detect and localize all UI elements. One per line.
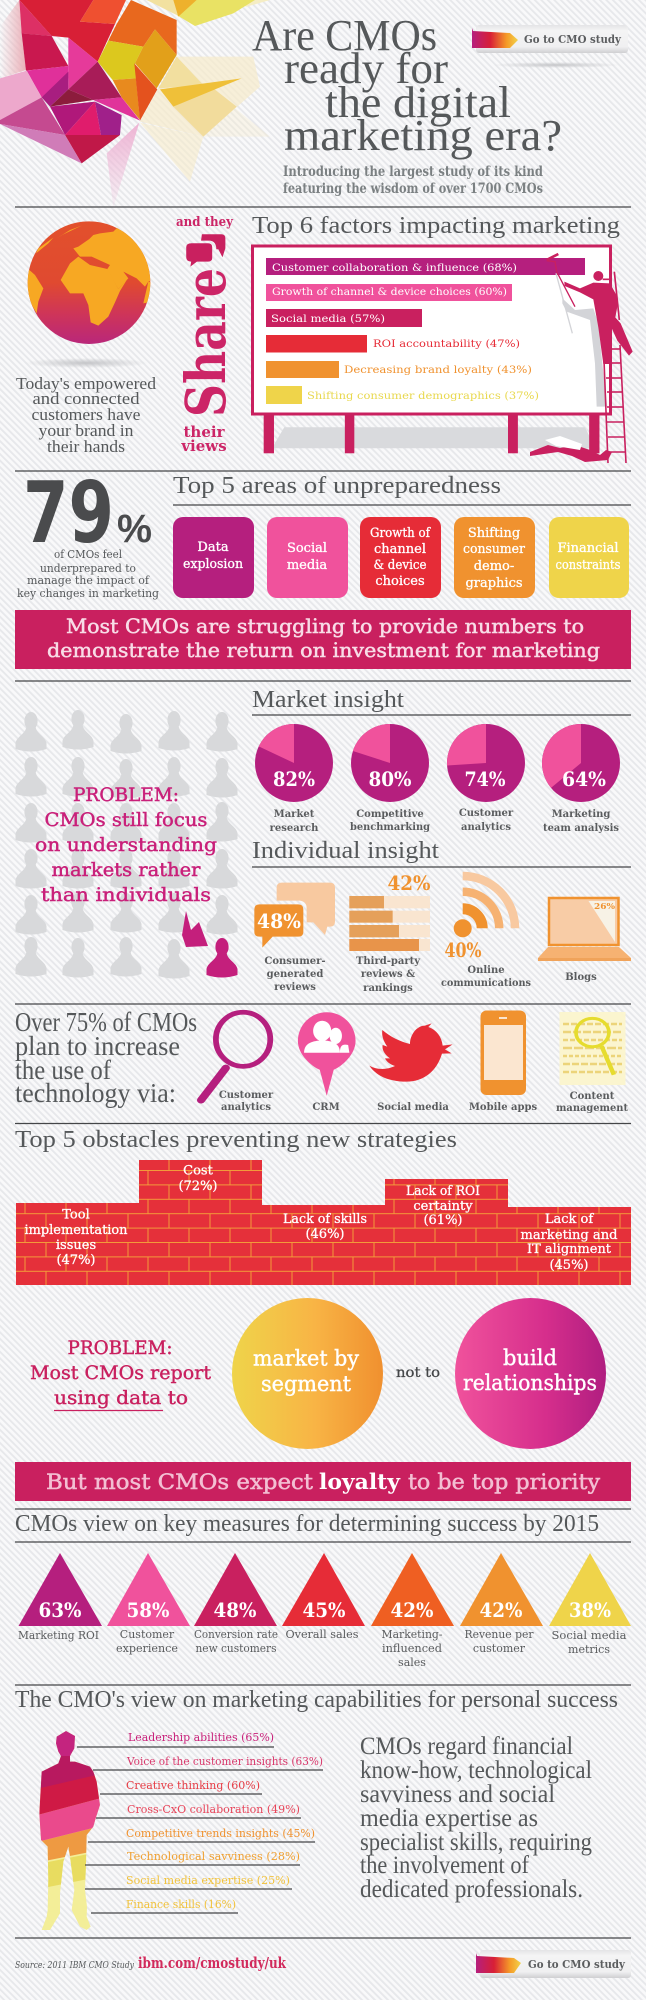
triangle: revenue per customer: customer <box>473 1642 526 1655</box>
item: voice of customer: Voice of the customer insights (63%) <box>126 1755 323 1768</box>
panel: crowd of people <box>16 710 238 978</box>
icon: review bars: 42% <box>388 871 430 895</box>
icon: pin CRM: CRM <box>312 1102 340 1113</box>
pie: marketing team analysis: Marketing <box>552 809 610 820</box>
bar: customer collaboration <box>266 258 585 275</box>
text: problem individuals: on understanding <box>35 834 217 856</box>
text: CMOs regard paragraph: the involvement of <box>360 1852 530 1879</box>
button: footer go to CMO study <box>476 1950 631 1978</box>
icon: magnifier customer analytics: Customer <box>219 1090 274 1101</box>
label: ROI certainty: (61%) <box>423 1213 463 1228</box>
label: skills: (46%) <box>305 1227 345 1242</box>
panel: market insight: Market insight <box>252 687 404 713</box>
text: empowered customers: their hands <box>47 437 125 456</box>
label: ROI certainty: Lack of ROI <box>406 1184 480 1199</box>
label: tool implementation: Tool <box>62 1208 90 1222</box>
triangle: revenue per customer <box>460 1553 543 1655</box>
title <box>252 11 562 160</box>
text: over 75% of CMOs: technology via: <box>15 1078 176 1108</box>
label: marketing IT alignment: marketing and <box>520 1228 618 1243</box>
heading: marketing capabilities: The CMO's view on marketing capabilities for personal success <box>15 1687 618 1713</box>
box: growth of channel: & device <box>374 558 427 573</box>
panel: market insight <box>252 687 631 834</box>
label: marketing IT alignment: IT alignment <box>527 1242 612 1257</box>
text: underprepared: key changes in marketing <box>17 586 160 600</box>
item: cross-CxO: Cross-CxO collaboration (49%) <box>127 1803 300 1816</box>
label: tool implementation: implementation <box>24 1223 128 1238</box>
text: CMOs regard paragraph: media expertise as <box>360 1805 538 1832</box>
text: CMOs regard paragraph: CMOs regard financial <box>360 1733 573 1760</box>
button: go to CMO study <box>472 25 628 68</box>
box: shifting consumer demographics <box>454 517 535 598</box>
box: data explosion <box>173 517 254 598</box>
vertical word: share: Share <box>173 268 238 417</box>
box: shifting consumer demographics: Shifting <box>468 526 520 541</box>
label: marketing IT alignment: Lack of <box>545 1212 594 1227</box>
pie: competitive benchmarking <box>350 724 430 833</box>
icon: review bars: Third-party <box>356 956 421 967</box>
panel: technology icons <box>201 1010 628 1114</box>
text: underprepared: manage the impact of <box>27 573 150 587</box>
text: problem individuals: than individuals <box>41 884 211 906</box>
icon: phone mobile apps: Mobile apps <box>469 1102 537 1113</box>
text: CMOs regard paragraph: specialist skills, requiring <box>360 1829 592 1856</box>
item: technological savviness: Technological savviness (28%) <box>127 1850 300 1863</box>
text: underprepared: of CMOs feel <box>54 547 122 561</box>
panel: 79 percent <box>17 464 160 600</box>
icon: magnifier customer analytics <box>201 1012 274 1113</box>
panel: share their views: their <box>184 423 226 441</box>
pie: competitive benchmarking: 80% <box>368 767 412 791</box>
chart: triangles key measures <box>18 1553 631 1669</box>
item: social media expertise: Social media expertise (25%) <box>126 1874 290 1887</box>
icon: laptop blogs <box>538 898 631 983</box>
triangle: social media metrics: metrics <box>568 1643 610 1656</box>
triangle: marketing ROI: Marketing ROI <box>18 1629 99 1642</box>
panel: individual insight: Individual insight <box>252 838 439 864</box>
label: tool implementation <box>24 1208 128 1268</box>
item: competitive trends: Competitive trends insights (45%) <box>126 1827 315 1840</box>
icon: magnifier customer analytics: analytics <box>221 1102 271 1113</box>
text: over 75% of CMOs: plan to increase <box>15 1031 180 1061</box>
icon: phone mobile apps <box>469 1010 537 1113</box>
icon: document content management: management <box>556 1103 628 1114</box>
bar: channel and device choices: Growth of channel & device choices (60%) <box>272 287 507 298</box>
panel: share their views: and they <box>176 215 233 230</box>
triangle: marketing influenced sales <box>371 1553 454 1669</box>
circle: market by segment: segment <box>261 1372 352 1396</box>
icon: wifi arcs <box>441 876 531 989</box>
label: skills <box>283 1212 367 1242</box>
box: social media: media <box>287 558 327 573</box>
bar: social media: Social media (57%) <box>271 314 385 325</box>
triangle: revenue per customer: Revenue per <box>464 1628 534 1641</box>
icon: wifi arcs: communications <box>441 978 531 989</box>
text: over 75% of CMOs: the use of <box>15 1055 111 1085</box>
source line <box>15 1954 286 1972</box>
box: financial constraints <box>549 517 629 598</box>
icon: review bubbles: reviews <box>274 982 316 993</box>
box: social media <box>267 517 348 598</box>
circle: build relationships <box>455 1298 606 1449</box>
bar: consumer demographics <box>266 386 539 404</box>
triangle: marketing ROI: 63% <box>38 1598 82 1622</box>
text: over 75% of CMOs: Over 75% of CMOs <box>15 1007 197 1037</box>
text: empowered customers: your brand in <box>38 421 134 440</box>
triangle: customer experience: 58% <box>126 1598 170 1622</box>
shadow under globe <box>24 358 148 368</box>
pie: market research: 82% <box>273 767 315 791</box>
box: data explosion: Data <box>197 540 229 555</box>
pie: marketing team analysis <box>542 724 620 834</box>
panel: top 5 areas of unpreparedness <box>173 473 631 598</box>
icon: review bubbles: Consumer- <box>264 956 326 967</box>
icon: speech bubbles <box>186 234 225 267</box>
text: problem individuals <box>35 784 217 906</box>
label: ROI certainty: certainty <box>413 1199 473 1214</box>
panel: capabilities list <box>77 1731 323 1913</box>
title: ready for <box>284 44 448 93</box>
panel: share their views: views <box>180 437 227 455</box>
box: growth of channel: Growth of <box>370 526 431 541</box>
triangle: marketing influenced sales: Marketing- <box>382 1628 443 1641</box>
bar: brand loyalty <box>266 361 532 378</box>
triangle: conversion rate: 48% <box>214 1598 256 1622</box>
bar: ROI accountability: ROI accountability (47%) <box>373 339 520 350</box>
icon: review bubbles <box>254 883 335 993</box>
triangle: revenue per customer: 42% <box>480 1598 522 1622</box>
triangle: customer experience: Customer <box>120 1628 175 1641</box>
icon: pin CRM <box>298 1012 356 1113</box>
item: finance skills: Finance skills (16%) <box>126 1898 236 1911</box>
icon: wifi arcs: 40% <box>444 938 482 962</box>
banner: ROI struggle: demonstrate the return on investment for marketing <box>47 638 600 662</box>
text: problem individuals: markets rather <box>52 859 201 881</box>
text: empowered customers: Today's empowered <box>16 374 157 393</box>
banner: loyalty priority: to be top priority <box>408 1470 600 1494</box>
text: problem individuals: CMOs still focus <box>44 809 208 831</box>
text: CMOs regard paragraph <box>360 1733 592 1903</box>
triangle: social media metrics: Social media <box>552 1629 627 1642</box>
triangle: conversion rate: new customers <box>196 1642 277 1655</box>
circle: market by segment <box>232 1298 383 1449</box>
icon: painter on ladder <box>530 254 633 463</box>
subtitle: featuring the wisdom of over 1700 CMOs <box>283 181 543 197</box>
text: problem individuals: PROBLEM: <box>73 784 179 806</box>
subtitle <box>283 164 543 197</box>
text: CMOs regard paragraph: dedicated professionals. <box>360 1876 583 1903</box>
heading: top 6 factors: Top 6 factors impacting marketing <box>252 213 620 239</box>
bar: channel and device choices <box>266 284 512 301</box>
label: cost: (72%) <box>178 1179 218 1194</box>
source line: Source: 2011 IBM CMO Study <box>15 1961 135 1971</box>
icon: review bubbles: generated <box>267 969 323 980</box>
circle: market by segment: market by <box>253 1346 359 1370</box>
icon: review bars: rankings <box>363 983 413 994</box>
stat: 79%: % <box>117 507 152 551</box>
icon: document content management: Content <box>570 1091 615 1102</box>
box: shifting consumer demographics: demo- <box>474 559 514 574</box>
text: problem data: Most CMOs report <box>30 1363 212 1384</box>
text: over 75% of CMOs <box>15 1007 197 1108</box>
triangle: customer experience <box>107 1553 190 1655</box>
triangle: social media metrics <box>549 1553 631 1656</box>
pie: customer analytics <box>447 724 525 833</box>
pie: marketing team analysis: team analysis <box>543 823 619 834</box>
pie: competitive benchmarking: benchmarking <box>350 822 430 833</box>
triangle: overall sales: 45% <box>302 1598 346 1622</box>
heading: top 5 obstacles: Top 5 obstacles preventing new strategies <box>15 1127 457 1153</box>
text: CMOs regard paragraph: know-how, technological <box>360 1757 592 1784</box>
bar: consumer demographics: Shifting consumer demographics (37%) <box>307 391 539 402</box>
box: data explosion: explosion <box>183 557 244 572</box>
label: cost: Cost <box>183 1164 214 1178</box>
bar: customer collaboration: Customer collaboration & influence (68%) <box>272 263 517 274</box>
label: skills: Lack of skills <box>283 1212 367 1227</box>
box: growth of channel <box>360 517 441 598</box>
icon: crimson individual with megaphone <box>182 911 238 978</box>
text: empowered customers: customers have <box>32 405 140 424</box>
text: empowered customers: and connected <box>32 389 140 408</box>
stat: 79%: 79 <box>23 464 114 563</box>
banner: loyalty priority: loyalty <box>319 1469 401 1494</box>
icon: review bars: reviews & <box>361 969 415 980</box>
icon: review bars <box>349 871 430 994</box>
panel: billboard chart <box>252 246 633 463</box>
pie: customer analytics: Customer <box>459 808 514 819</box>
box: shifting consumer demographics: graphics <box>465 576 523 591</box>
box: social media: Social <box>287 541 327 556</box>
icon: person silhouette bands <box>39 1731 100 1930</box>
icon: bird social media: Social media <box>377 1102 449 1113</box>
text: empowered customers <box>16 374 157 456</box>
triangle: conversion rate <box>194 1553 278 1655</box>
label: tool implementation: issues <box>56 1238 96 1253</box>
label: tool implementation: (47%) <box>56 1253 96 1268</box>
box: growth of channel: choices <box>375 574 425 589</box>
pie: customer analytics: analytics <box>461 822 511 833</box>
banner: ROI struggle: Most CMOs are struggling to provide numbers to <box>66 614 584 638</box>
icon: laptop blogs: 26% <box>594 902 615 912</box>
icon: bird social media <box>369 1023 453 1113</box>
triangle: marketing influenced sales: influenced <box>382 1642 442 1655</box>
triangle: marketing influenced sales: sales <box>398 1656 426 1669</box>
text: problem data: using data to <box>54 1388 188 1409</box>
panel: share their views <box>173 215 238 455</box>
box: financial constraints: constraints <box>556 558 620 573</box>
triangle: overall sales <box>282 1553 365 1641</box>
box: financial constraints: Financial <box>557 541 619 556</box>
triangle: overall sales: Overall sales <box>286 1628 359 1641</box>
text: underprepared <box>17 547 160 600</box>
icon: globe <box>26 221 153 344</box>
button: footer go to CMO study: Go to CMO study <box>528 1957 625 1971</box>
label: ROI certainty <box>406 1184 480 1228</box>
button: go to CMO study: Go to CMO study <box>524 32 621 46</box>
label: marketing IT alignment: (45%) <box>549 1258 589 1273</box>
pie: marketing team analysis: 64% <box>562 767 606 791</box>
icon: review bubbles: 48% <box>257 909 301 933</box>
label: cost <box>178 1164 218 1194</box>
circle: build relationships: relationships <box>463 1371 597 1395</box>
box: shifting consumer demographics: consumer <box>463 542 526 557</box>
bar: social media <box>266 309 422 327</box>
text: problem data <box>30 1338 212 1410</box>
text: underprepared: underprepared to <box>40 561 136 575</box>
source line: ibm.com/cmostudy/uk <box>138 1954 286 1972</box>
pie: market research: Market <box>274 809 315 820</box>
pie: market research: research <box>270 823 319 834</box>
panel: individual insight <box>252 838 631 994</box>
box: growth of channel: channel <box>374 542 426 557</box>
text: not to: not to <box>396 1365 440 1381</box>
icon: document content management <box>556 1012 628 1114</box>
text: problem data: PROBLEM: <box>68 1338 172 1359</box>
banner: ROI struggle <box>15 610 631 669</box>
triangle: marketing influenced sales: 42% <box>390 1598 434 1622</box>
title: the digital <box>325 78 511 127</box>
text: CMOs regard paragraph: savviness and social <box>360 1781 555 1808</box>
item: leadership: Leadership abilities (65%) <box>128 1731 274 1744</box>
circle: build relationships: build <box>503 1346 557 1370</box>
subtitle: Introducing the largest study of its kind <box>283 164 543 180</box>
banner: loyalty priority <box>15 1462 631 1501</box>
header art: geometric polygons <box>0 0 270 207</box>
chart: brick wall obstacles <box>16 1160 631 1285</box>
panel: top 5 areas of unpreparedness: Top 5 areas of unpreparedness <box>173 473 501 499</box>
label: marketing IT alignment <box>520 1212 618 1273</box>
heading: key measures: CMOs view on key measures for determining success by 2015 <box>15 1511 599 1537</box>
title: Are CMOs <box>252 11 437 60</box>
bar: ROI accountability <box>266 335 520 352</box>
panel: globe and customers <box>16 221 157 456</box>
pie: market research <box>255 724 333 834</box>
icon: wifi arcs: Online <box>467 965 505 976</box>
pie: competitive benchmarking: Competitive <box>356 809 424 820</box>
triangle: social media metrics: 38% <box>569 1598 611 1622</box>
title: marketing era? <box>284 111 562 160</box>
icon: laptop blogs: Blogs <box>565 972 597 983</box>
bar: brand loyalty: Decreasing brand loyalty (43%) <box>344 365 532 376</box>
triangle: conversion rate: Conversion rate <box>194 1628 278 1641</box>
triangle: marketing ROI <box>18 1553 102 1642</box>
banner: loyalty priority: But most CMOs expect <box>46 1470 314 1494</box>
item: creative thinking: Creative thinking (60%) <box>126 1779 260 1792</box>
triangle: customer experience: experience <box>116 1642 178 1655</box>
pie: customer analytics: 74% <box>464 767 506 791</box>
